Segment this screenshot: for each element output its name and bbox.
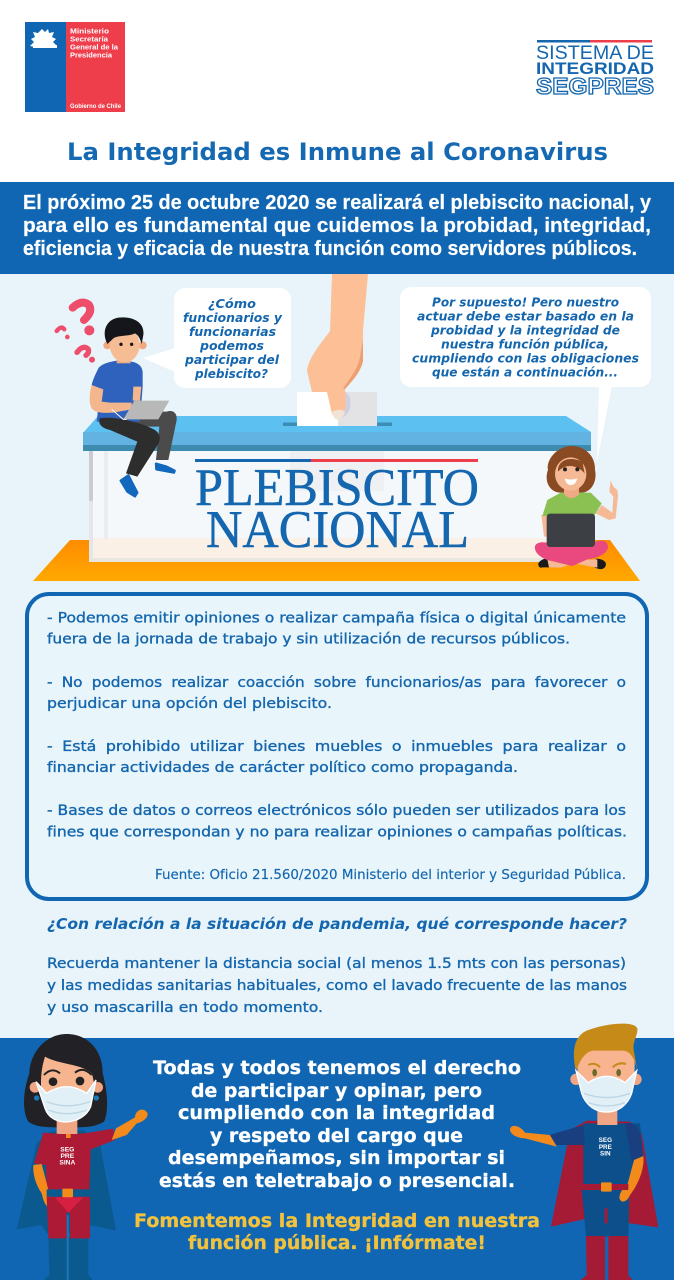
panel: obligations: fines que correspondan y no para realizar opiniones o campañas políticas. — [47, 824, 627, 840]
logo: Ministerio Secretaría General de la Presidencia: Secretaría — [70, 34, 109, 44]
pandemic advice text — [47, 956, 627, 1016]
logo: Ministerio Secretaría General de la Presidencia — [25, 22, 125, 112]
logo: Ministerio Secretaría General de la Presidencia: Presidencia — [70, 50, 113, 60]
shirt label: SEG — [599, 1137, 612, 1144]
panel: obligations: - Podemos emitir opiniones o realizar campaña física o digital únicamente — [47, 610, 626, 626]
call to action — [134, 1211, 540, 1254]
panel: obligations: financiar actividades de carácter político como propaganda. — [47, 760, 518, 776]
speech bubble: question — [143, 288, 291, 388]
plebiscito sign: NACIONAL — [206, 501, 469, 559]
title: La Integridad es Inmune al Coronavirus — [67, 138, 608, 166]
illustration: ballot box scene — [33, 274, 651, 581]
call to action: Fomentemos la Integridad en nuestra — [134, 1211, 540, 1232]
ballot box body — [89, 451, 587, 562]
character: girl with laptop — [535, 446, 618, 569]
shirt label — [59, 1146, 75, 1167]
speech bubble: question: plebiscito? — [194, 366, 268, 381]
logo: Sistema de Integridad Segpres: SEGPRES — [536, 73, 654, 99]
character: superheroine with mask — [17, 1034, 148, 1280]
speech bubble: question: funcionarias — [189, 324, 276, 339]
footer message: desempeñamos, sin importar si — [168, 1148, 505, 1169]
shirt label — [599, 1137, 612, 1158]
logo: Ministerio Secretaría General de la Presidencia: General de la — [70, 42, 119, 52]
speech bubble: question: ¿Cómo — [208, 296, 256, 311]
panel: obligations: Fuente: Oficio 21.560/2020 Ministerio del interior y Seguridad Pública. — [155, 867, 626, 883]
speech bubble: answer: cumpliendo con las obligaciones — [412, 350, 639, 366]
panel: obligations: fuera de la jornada de trabajo y sin utilización de recursos públicos. — [47, 632, 570, 648]
orange floor — [33, 540, 640, 581]
plebiscito sign: PLEBISCITO — [195, 459, 479, 517]
footer message: estás en teletrabajo o presencial. — [159, 1171, 515, 1192]
footer message: Todas y todos tenemos el derecho — [153, 1058, 521, 1079]
intro banner — [0, 182, 674, 274]
speech bubble: answer: nuestra función pública, — [441, 336, 609, 352]
speech bubble: answer — [400, 287, 651, 462]
shirt label: SEG — [60, 1146, 74, 1153]
pandemic question heading: ¿Con relación a la situación de pandemia, qué corresponde hacer? — [47, 915, 627, 933]
footer message: de participar y opinar, pero — [191, 1081, 482, 1102]
character: boy with laptop and question marks — [57, 303, 177, 496]
shirt label: PRE — [60, 1153, 75, 1160]
logo: Ministerio Secretaría General de la Presidencia: Ministerio — [70, 26, 110, 36]
speech bubble: answer: que están a continuación... — [432, 364, 618, 380]
footer banner — [0, 1038, 674, 1280]
plebiscito sign — [195, 459, 479, 559]
icon: question marks — [57, 303, 95, 363]
intro banner: para ello es fundamental que cuidemos la probidad, integridad, — [23, 214, 651, 237]
pandemic advice text: y las medidas sanitarias habituales, como el lavado frecuente de las manos — [47, 978, 627, 994]
logo: Sistema de Integridad Segpres: SISTEMA DE — [536, 42, 654, 64]
intro banner: eficiencia y eficacia de nuestra función como servidores públicos. — [23, 237, 637, 260]
speech bubble: question: participar del — [184, 352, 280, 367]
ballot paper — [297, 392, 377, 426]
footer message: cumpliendo con la integridad — [178, 1103, 495, 1124]
shirt label: PRE — [599, 1144, 612, 1151]
intro banner: El próximo 25 de octubre 2020 se realizará el plebiscito nacional, y — [23, 191, 652, 214]
panel: obligations: - Está prohibido utilizar bienes muebles o inmuebles para realizar o — [47, 739, 626, 755]
icon: coat of arms — [30, 29, 57, 48]
speech bubble: question: podemos — [199, 338, 264, 353]
light background panel — [0, 274, 674, 1038]
panel: obligations: - No podemos realizar coacción sobre funcionarios/as para favorecer o — [47, 675, 626, 691]
logo: Ministerio Secretaría General de la Presidencia: Gobierno de Chile — [70, 103, 121, 110]
logo: Sistema de Integridad Segpres: INTEGRIDAD — [536, 60, 654, 78]
ballot box lid — [83, 416, 591, 451]
panel: obligations: perjudicar una opción del plebiscito. — [47, 696, 332, 712]
character: superhero with mask — [510, 1024, 658, 1280]
speech bubble: answer: probidad y la integridad de — [430, 322, 620, 338]
panel: obligations: - Bases de datos o correos electrónicos sólo pueden ser utilizados para los — [47, 803, 626, 819]
shirt label: SINA — [59, 1160, 75, 1167]
hand — [307, 274, 368, 420]
call to action: función pública. ¡Infórmate! — [188, 1233, 486, 1254]
footer message — [153, 1058, 521, 1192]
footer message: y respeto del cargo que — [210, 1126, 463, 1147]
logo: Sistema de Integridad Segpres — [536, 40, 654, 99]
speech bubble: answer: Por supuesto! Pero nuestro — [432, 294, 619, 310]
shirt label: SIN — [600, 1151, 611, 1158]
panel: obligations — [27, 594, 647, 899]
pandemic advice text: y uso mascarilla en todo momento. — [47, 1000, 323, 1016]
speech bubble: answer: actuar debe estar basado en la — [417, 308, 634, 324]
pandemic advice text: Recuerda mantener la distancia social (al menos 1.5 mts con las personas) — [47, 956, 626, 972]
speech bubble: question: funcionarios y — [183, 310, 283, 325]
